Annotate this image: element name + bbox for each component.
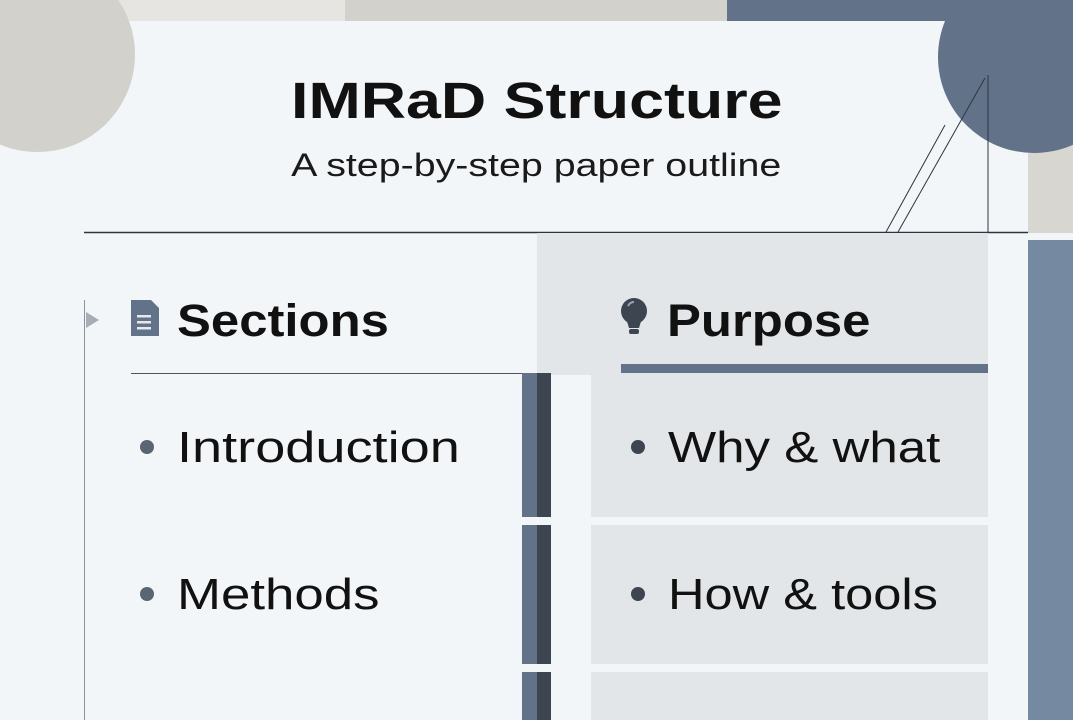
icon: document: [131, 300, 159, 336]
subtitle: A step-by-step paper outline: [291, 147, 782, 183]
top band: [118, 0, 957, 21]
right slate strip: [1028, 240, 1073, 720]
item: Methods: Methods: [177, 570, 380, 619]
item: How & tools: How & tools: [668, 570, 938, 619]
purpose cells: [591, 375, 988, 720]
decorative circle right: [938, 0, 1073, 153]
icon: lightbulb: [621, 298, 647, 334]
divider bars: [522, 373, 551, 720]
purpose underline bar: [621, 364, 988, 373]
purpose header panel: [537, 233, 988, 375]
sections heading: Sections: [177, 295, 389, 346]
item: Introduction: Introduction: [177, 423, 460, 472]
right beige strip: [1028, 0, 1073, 233]
item: Why & what: Why & what: [668, 423, 940, 472]
purpose heading: Purpose: [667, 295, 870, 346]
title: IMRaD Structure: [291, 72, 782, 129]
decorative circle left: [0, 0, 135, 152]
